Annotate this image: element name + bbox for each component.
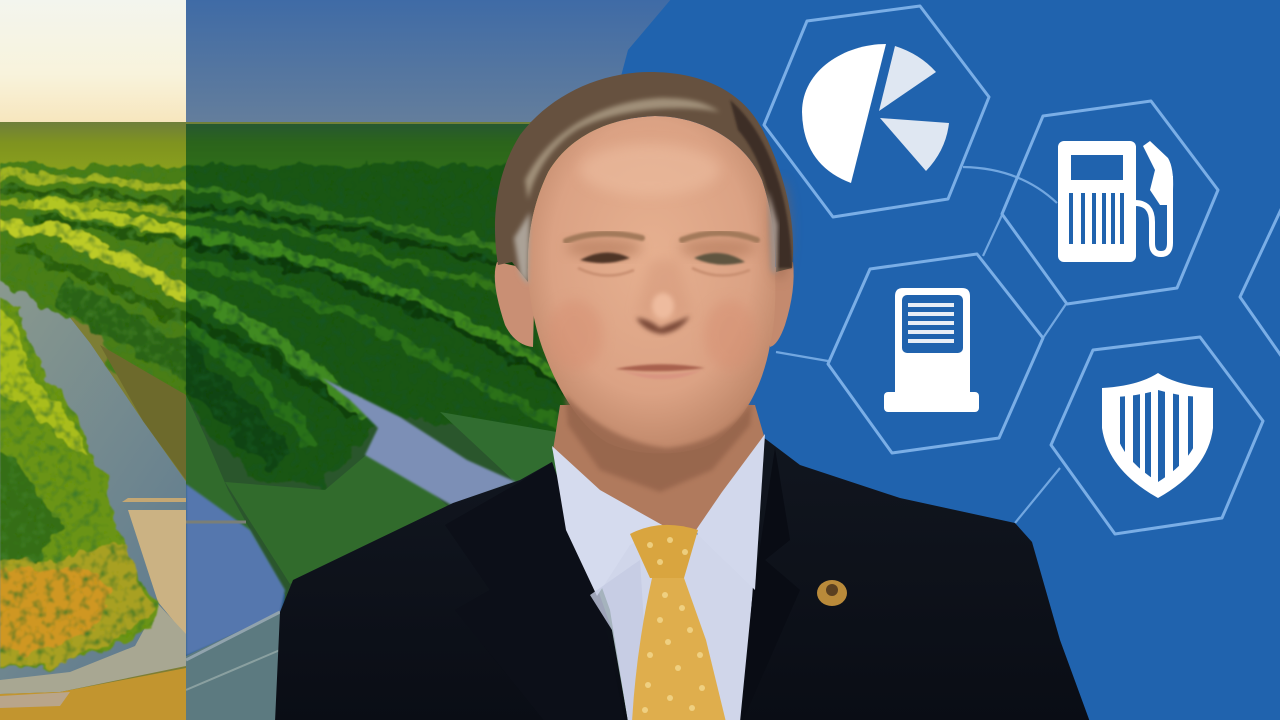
icon: pie chart (802, 44, 949, 183)
shirt (552, 436, 764, 720)
connector lines (776, 167, 1066, 523)
icon: shield (1102, 373, 1213, 498)
lapel pin (817, 580, 847, 606)
tie (630, 525, 726, 720)
hexagon: cropped right (1240, 203, 1280, 360)
hexagon: pie chart (764, 6, 989, 217)
curved light road band (0, 604, 186, 694)
mouth (615, 364, 705, 379)
hexagon network (764, 6, 1280, 534)
hexagon: fuel pump (1002, 101, 1218, 304)
neck (553, 405, 764, 534)
sky (0, 0, 706, 124)
orchard landscape (0, 122, 628, 720)
foreground tree row (0, 295, 157, 670)
far fields (0, 122, 700, 182)
hair (495, 72, 793, 285)
row shadows (0, 190, 580, 282)
blue panel (620, 0, 1280, 720)
eyes (578, 252, 750, 276)
lapel shading (445, 462, 625, 720)
cheek warmth (547, 144, 790, 370)
hexagon: shield (1051, 337, 1263, 534)
ears (495, 262, 794, 347)
hexagon: kiosk (828, 254, 1043, 453)
jaw shadow (565, 395, 752, 492)
tree rows mass (0, 165, 580, 486)
blue overlay (186, 124, 706, 720)
suit jacket (275, 437, 1090, 720)
portrait (275, 72, 1090, 720)
icon: document kiosk (884, 288, 979, 412)
eyebrows (566, 233, 757, 241)
icon: fuel pump (1058, 141, 1173, 262)
eye socket shading (566, 238, 756, 258)
main gravel road (0, 262, 285, 690)
orange foreground ground (0, 668, 186, 720)
ground and grass (0, 170, 700, 720)
nose (636, 260, 692, 334)
bright row tops (0, 176, 580, 264)
overlay road segments (186, 378, 516, 720)
grass patches (225, 445, 452, 584)
shirt collar (552, 434, 765, 720)
tan road junction (128, 510, 186, 636)
face (528, 116, 775, 453)
